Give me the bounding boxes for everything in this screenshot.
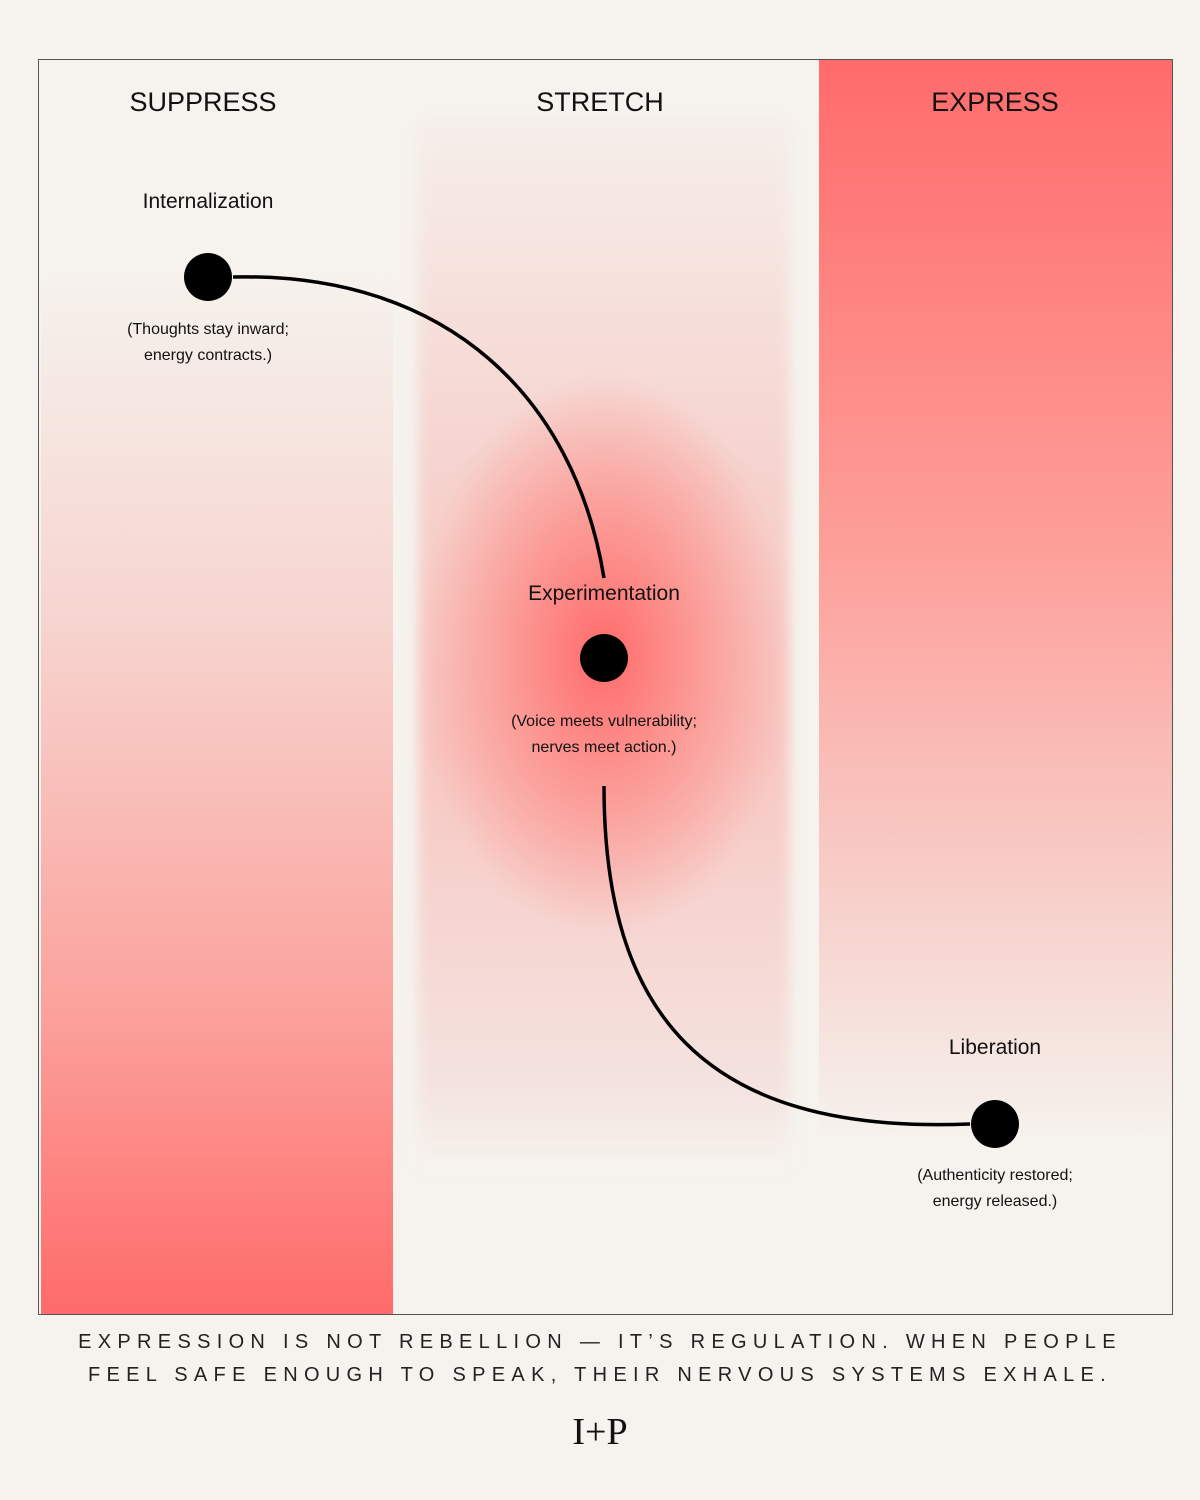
caption xyxy=(78,1331,1122,1386)
note: experimentation: (Voice meets vulnerability; nerves meet action.) xyxy=(511,713,697,756)
note: internalization: (Thoughts stay inward; energy contracts.) xyxy=(127,321,289,364)
label: internalization: Internalization xyxy=(143,190,273,213)
panel: express column xyxy=(819,60,1172,1145)
heading: suppress: SUPPRESS xyxy=(129,87,277,117)
note: liberation: (Authenticity restored; energy released.) xyxy=(917,1167,1073,1210)
frame xyxy=(38,59,1173,1315)
label: liberation: Liberation xyxy=(949,1036,1041,1059)
logo: I+P xyxy=(572,1411,628,1453)
label: experimentation: Experimentation xyxy=(528,582,680,605)
panel: stretch column xyxy=(418,120,790,1170)
caption: FEEL SAFE ENOUGH TO SPEAK, THEIR NERVOUS SYSTEMS EXHALE. xyxy=(88,1364,1112,1386)
heading: stretch: STRETCH xyxy=(536,87,664,117)
caption: EXPRESSION IS NOT REBELLION — IT’S REGULATION. WHEN PEOPLE xyxy=(78,1331,1122,1353)
heading: express: EXPRESS xyxy=(931,87,1059,117)
panel: suppress column xyxy=(41,60,393,1314)
